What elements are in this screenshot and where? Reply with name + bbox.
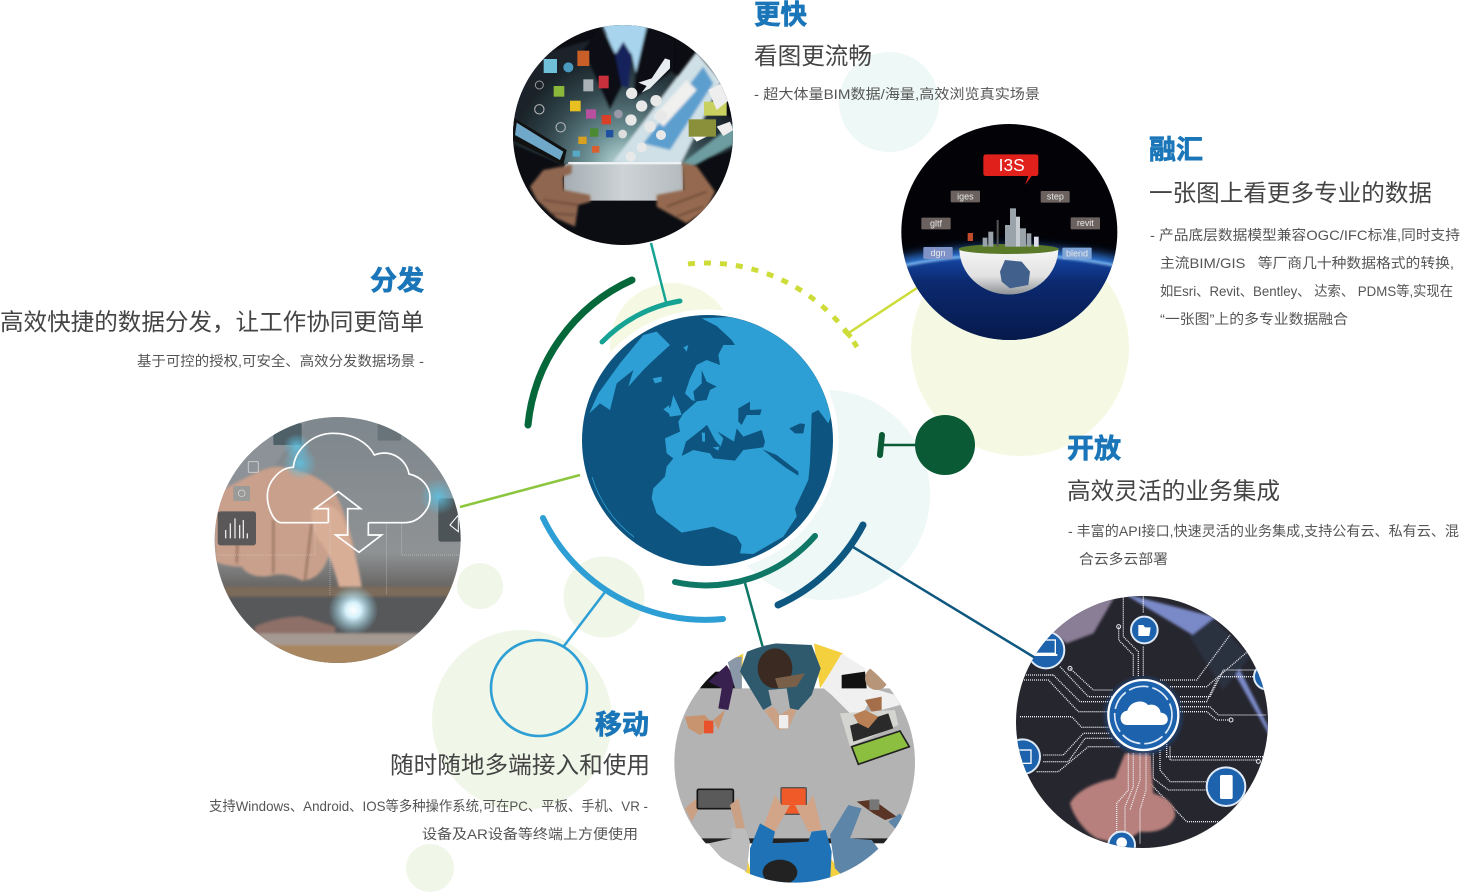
text: 融汇: 如Esri、Revit、Bentley、 达索、 PDMS等,实现在 [1160, 283, 1453, 299]
format labels: dgn [930, 248, 945, 258]
text: 移动: 支持Windows、Android、IOS等多种操作系统,可在PC、平板、手机、VR - [209, 798, 648, 814]
text: 更快: 看图更流畅 [754, 43, 872, 69]
text: 更快 [754, 0, 1040, 102]
photo: cloud network [1016, 596, 1268, 848]
circuit traces [1020, 593, 1270, 822]
seas [682, 346, 805, 476]
transfer arrows [315, 492, 382, 552]
cloud outline [267, 433, 430, 523]
connector lines [460, 243, 1037, 659]
text: 更快: - 超大体量BIM数据/海量,高效浏览真实场景 [754, 86, 1040, 102]
format labels: step [1047, 192, 1064, 202]
node: dark green disc [915, 415, 975, 475]
photo: meeting table [672, 640, 918, 887]
text: 开放: 高效灵活的业务集成 [1067, 478, 1280, 504]
text: 开放: 开放 [1067, 434, 1121, 464]
arc: green teal [675, 536, 815, 585]
text: 移动: 随时随地多端接入和使用 [390, 752, 650, 778]
text: 分发: 高效快捷的数据分发，让工作协同更简单 [0, 309, 424, 335]
photo: cloud distribution [212, 413, 465, 668]
cloud hub [1102, 674, 1185, 758]
format labels [921, 154, 1100, 259]
text: 分发 [0, 266, 424, 369]
format labels: iges [957, 191, 974, 201]
text: 分发: 基于可控的授权,可安全、高效分发数据场景 - [137, 353, 424, 369]
text: 移动: 移动 [595, 710, 649, 740]
text: 开放: - 丰富的API接口,快速灵活的业务集成,支持公有云、私有云、混 [1068, 523, 1459, 539]
text: 开放 [1067, 434, 1459, 567]
format labels: revit [1077, 218, 1094, 228]
text: 开放: 合云多云部署 [1079, 551, 1168, 567]
text: 融汇: 一张图上看更多专业的数据 [1149, 180, 1432, 206]
text: 融汇 [1149, 135, 1460, 327]
land: greenland [589, 332, 670, 413]
device nodes [1017, 616, 1264, 848]
photo: tablet with apps [510, 20, 737, 247]
text: 融汇: - 产品底层数据模型兼容OGC/IFC标准,同时支持 [1150, 227, 1460, 243]
globe [576, 310, 843, 572]
text: 移动: 设备及AR设备等终端上方便使用 [422, 826, 638, 842]
text: 融汇: “一张图”上的多专业数据融合 [1160, 311, 1348, 327]
format labels: gltf [930, 218, 942, 228]
text: 融汇: 融汇 [1149, 135, 1203, 165]
land: italy and islands [707, 424, 723, 447]
background pale circles [406, 52, 1129, 892]
text: 分发: 分发 [370, 266, 424, 296]
photo: I3S globe [901, 124, 1118, 340]
arc: dark green [528, 280, 632, 425]
ring arcs [528, 263, 863, 620]
arc: dark blue [778, 525, 863, 605]
format labels: I3S [999, 155, 1025, 175]
text: 移动 [209, 710, 650, 842]
format labels: blend [1066, 249, 1088, 259]
text: 融汇: 主流BIM/GIS 等厂商几十种数据格式的转换, [1160, 255, 1454, 271]
text: 更快: 更快 [754, 0, 807, 30]
chart tile [218, 511, 256, 545]
hand [1070, 753, 1175, 843]
connector end caps [844, 330, 882, 455]
dome [959, 248, 1058, 294]
node: open blue ring [491, 640, 587, 736]
land: eurasia and africa [652, 313, 843, 554]
arc: light blue [543, 518, 723, 620]
arc: teal [602, 301, 680, 342]
arc: yellow dashed [688, 263, 857, 347]
touch spark [328, 585, 378, 635]
